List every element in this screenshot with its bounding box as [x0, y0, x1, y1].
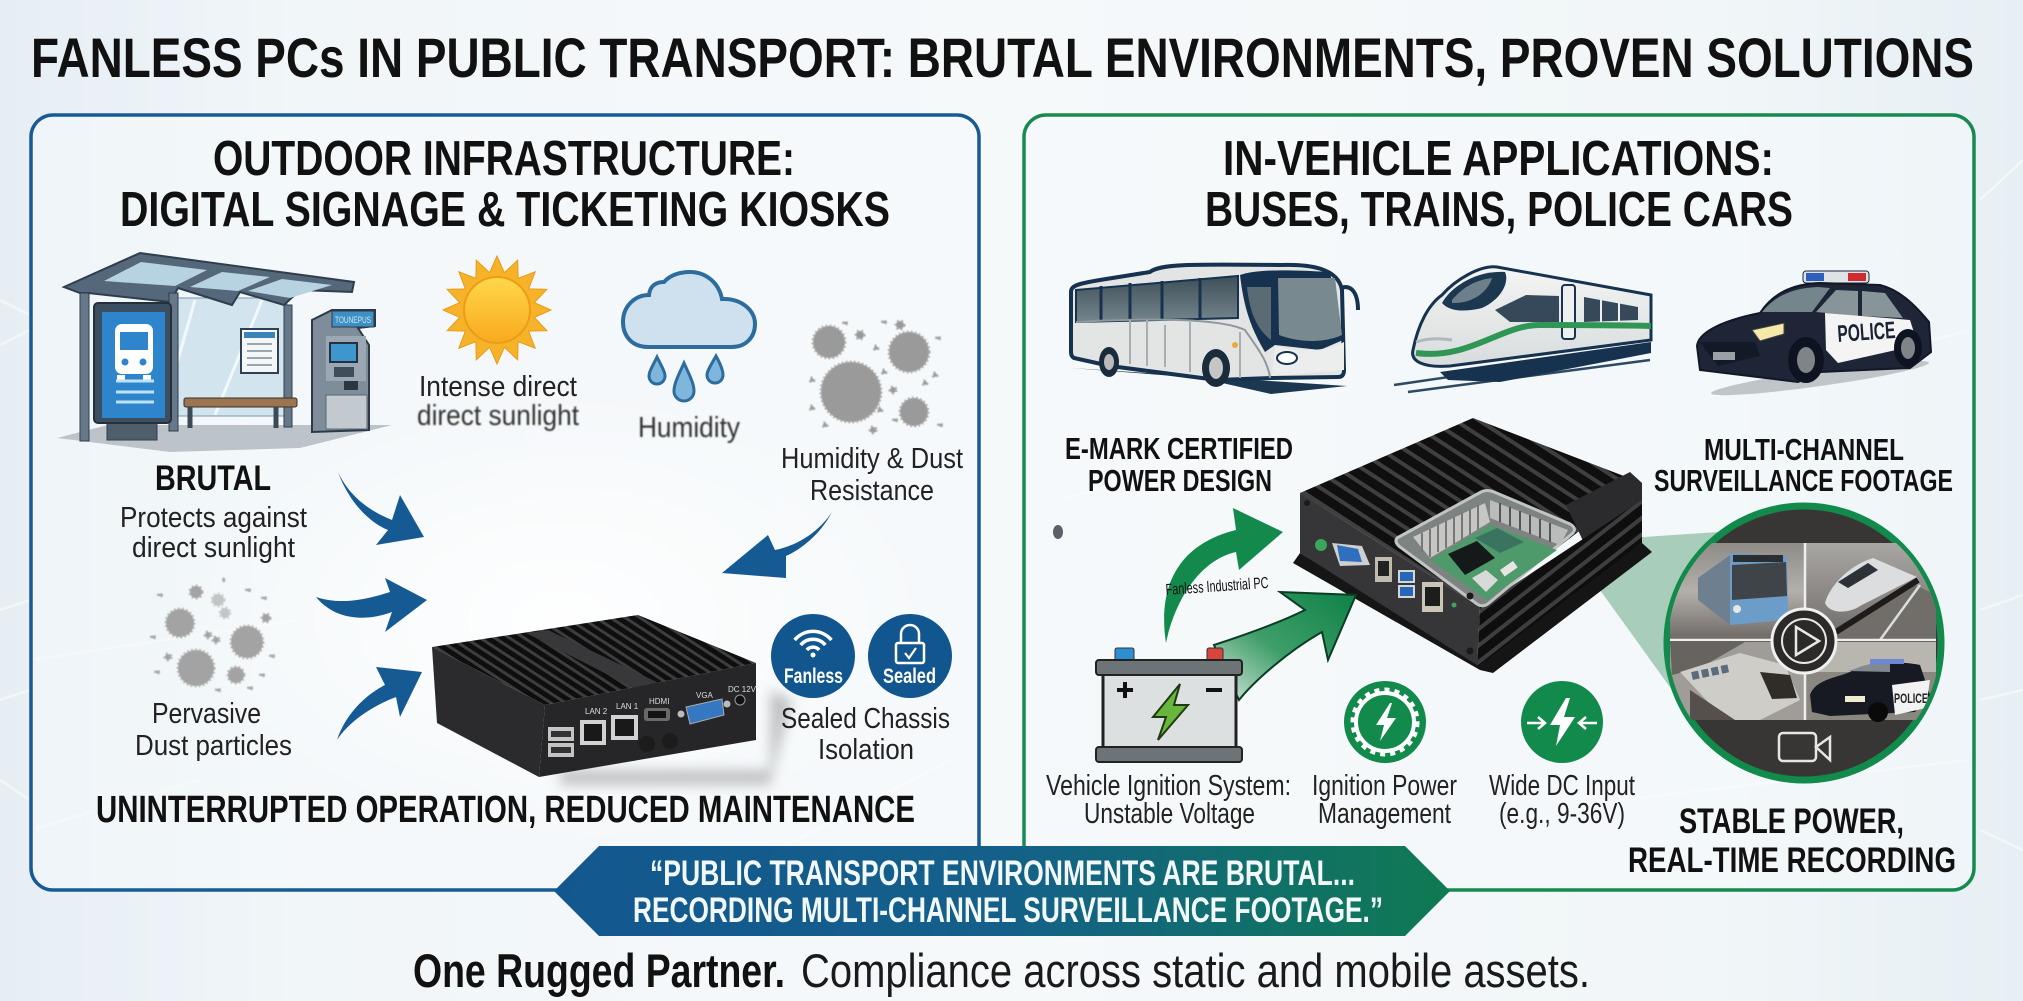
play button [1772, 609, 1836, 673]
label: sealed chassis isolation: Isolation [818, 734, 914, 766]
statement: stable power, real-time recording [1628, 802, 1956, 880]
label: brutal: BRUTAL [155, 459, 271, 498]
quote banner: RECORDING MULTI-CHANNEL SURVEILLANCE FOOTAGE.” [633, 891, 1383, 930]
heading: outdoor infrastructure [120, 132, 890, 237]
label: fanless industrial PC: Fanless Industrial PC [1165, 575, 1269, 599]
icon: video camera [1779, 733, 1830, 761]
surveillance footage circle [1667, 506, 1941, 780]
icon: dust particles bottom [152, 579, 274, 692]
heading: in-vehicle applications: BUSES, TRAINS, POLICE CARS [1205, 183, 1793, 237]
icon: smudge dot [1053, 525, 1063, 539]
icon: rain cloud [623, 272, 755, 401]
label: e-mark certified power design [1065, 431, 1293, 498]
heading: outdoor infrastructure: DIGITAL SIGNAGE & TICKETING KIOSKS [120, 183, 890, 237]
label: ignition power management: Management [1318, 798, 1451, 830]
icon: police car: POLICE [1837, 317, 1896, 348]
footage: police car: POLICE [1894, 690, 1928, 706]
arrows: hazards converge on PC [316, 472, 832, 740]
panel: outdoor infrastructure [31, 115, 979, 890]
footer tagline [413, 944, 1590, 997]
image: fanless mini PC: HDMI [649, 697, 669, 706]
icon: bus shelter and ticketing kiosk [57, 253, 392, 452]
image: fanless mini PC: LAN 2 [585, 707, 608, 716]
label: brutal: direct sunlight [132, 532, 295, 564]
icon: car battery [1096, 648, 1242, 762]
footage: police car [1806, 642, 1936, 722]
label: sealed chassis isolation [781, 703, 950, 766]
icon: high-speed train [1394, 267, 1651, 392]
label: pervasive dust particles: Dust particles [135, 730, 292, 762]
icon: police car [1697, 271, 1931, 401]
label: vehicle ignition system: Unstable Voltage [1084, 798, 1255, 830]
label: multi-channel surveillance footage: MULTI-CHANNEL [1704, 432, 1904, 467]
label: vehicle ignition system: Vehicle Ignition System: [1046, 770, 1291, 802]
label: e-mark certified power design: E-MARK CERTIFIED [1065, 431, 1293, 466]
label: humidity and dust resistance [781, 443, 963, 507]
label: ignition power management: Ignition Power [1312, 770, 1457, 802]
label: humidity and dust resistance: Resistance [810, 475, 934, 507]
label: humidity: Humidity [638, 412, 740, 444]
footer tagline: Compliance across static and mobile assets. [801, 944, 1590, 997]
footage: bus [1698, 553, 1788, 625]
icon: sun [443, 256, 551, 364]
label: humidity and dust resistance: Humidity & Dust [781, 443, 963, 475]
label: brutal [120, 459, 307, 564]
footage: bottom-left train [1670, 642, 1800, 720]
footage: top-right train [1825, 558, 1936, 640]
label: brutal: Protects against [120, 502, 307, 534]
badge: sealed: Sealed [883, 665, 936, 688]
image: fanless mini PC: LAN 1 [616, 702, 639, 711]
badge: sealed [868, 614, 952, 698]
footer tagline: One Rugged Partner. [413, 944, 785, 997]
image: fanless mini PC [432, 615, 757, 777]
label: wide DC input: Wide DC Input [1489, 770, 1635, 802]
arrow: green curved from battery to PC [1164, 508, 1283, 643]
arrow: green straight from battery to PC [1214, 592, 1356, 700]
quote banner [554, 846, 1450, 936]
label: intense direct sunlight [417, 371, 579, 432]
image: fanless mini PC: VGA [696, 691, 714, 700]
badge: fanless [771, 614, 855, 698]
icon: bus [1071, 265, 1358, 394]
label: intense direct sunlight: Intense direct [419, 371, 577, 403]
panel: in-vehicle applications [1024, 115, 1974, 890]
icon: bus shelter and ticketing kiosk: TOUNEPUS [335, 315, 371, 325]
image: fanless mini PC: DC 12V [728, 685, 757, 694]
label: pervasive dust particles [135, 698, 292, 762]
label: wide DC input [1489, 770, 1635, 830]
heading: in-vehicle applications: IN-VEHICLE APPLICATIONS: [1223, 132, 1774, 186]
heading: outdoor infrastructure: OUTDOOR INFRASTRUCTURE: [213, 132, 795, 186]
image: industrial fanless PC with open lid [1293, 418, 1652, 673]
badge: fanless: Fanless [784, 665, 843, 688]
label: e-mark certified power design: POWER DESIGN [1088, 463, 1272, 498]
heading: in-vehicle applications [1205, 132, 1793, 237]
label: pervasive dust particles: Pervasive [152, 698, 261, 730]
label: sealed chassis isolation: Sealed Chassis [781, 703, 950, 735]
icon: ignition power management [1344, 681, 1426, 763]
statement: uninterrupted operation: UNINTERRUPTED OPERATION, REDUCED MAINTENANCE [96, 789, 915, 831]
quote banner: “PUBLIC TRANSPORT ENVIRONMENTS ARE BRUTAL... [650, 854, 1355, 893]
label: vehicle ignition system [1046, 770, 1291, 830]
shadow smudge behind PC [560, 690, 792, 785]
icon: dust particles top [810, 320, 942, 433]
label: ignition power management [1312, 770, 1457, 830]
beam: PC to footage circle [1600, 531, 1733, 690]
label: wide DC input: (e.g., 9-36V) [1499, 798, 1625, 830]
icon: wide DC input [1521, 681, 1603, 763]
statement: stable power, real-time recording: STABLE POWER, [1679, 802, 1904, 841]
label: multi-channel surveillance footage [1654, 432, 1953, 498]
label: intense direct sunlight: direct sunlight [417, 400, 579, 432]
